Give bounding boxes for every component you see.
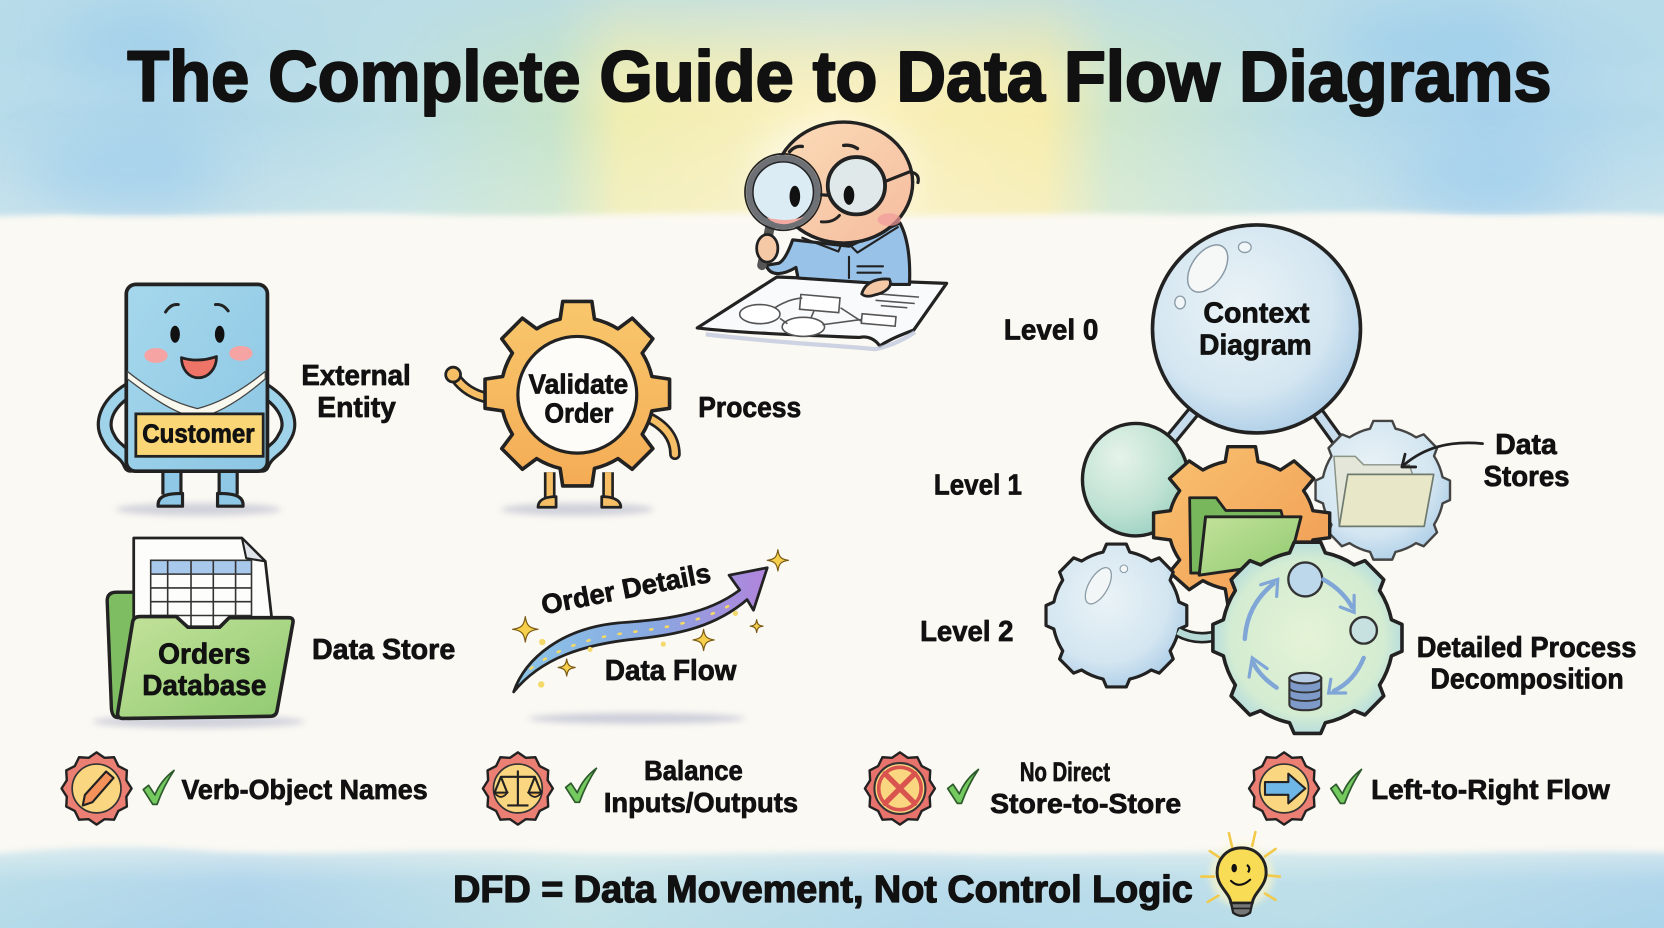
orange gear with green folder [1154,447,1330,604]
right gear with faded data store [1316,421,1450,560]
hands [757,235,778,262]
label: external entity: External [301,360,411,392]
badge: pencil [62,752,132,825]
external entity: customer character [105,284,288,506]
customer label [136,414,263,456]
face [144,304,253,378]
gear [485,301,670,486]
customer label: Customer [142,421,255,449]
body [126,284,267,471]
glasses [828,157,885,214]
cycle arrows [1245,579,1364,693]
rule: verb-object names: Verb-Object Names [181,774,428,805]
level labels [920,315,1098,648]
label: process: Process [698,392,801,424]
data store: orders database folder [107,538,293,718]
hierarchy diagram [1046,225,1483,733]
level 0 context bubble: Diagram [1199,329,1312,361]
data store shadow [92,715,305,728]
shirt [766,223,910,284]
label: detailed process decomposition: Detailed Process [1417,632,1636,664]
connector between level 2 gears [1178,631,1220,638]
rule: no direct store-to-store [865,752,1181,825]
footer takeaway: DFD = Data Movement, Not Control Logic [453,868,1193,911]
data flow arrow with sparkles [513,550,788,724]
entity shadow [116,503,281,516]
rule: balance inputs/outputs: Inputs/Outputs [604,787,798,818]
folder back [107,592,154,717]
flow shadow [528,713,745,724]
level labels: Level 0 [1004,315,1098,347]
process shadow [501,503,654,516]
level labels: Level 1 [934,470,1022,502]
label: data stores: Data [1495,429,1558,461]
badge: scales [483,752,553,825]
folder front [118,617,293,718]
gear text [528,369,628,428]
flow caption: Data Flow [605,655,737,687]
label: external entity: Entity [317,392,396,424]
character: analyst with magnifying glass [697,122,947,349]
badge: arrow [1249,752,1319,825]
spreadsheet page [134,538,274,637]
folder text: Orders [158,638,250,670]
badge: prohibited [865,752,935,825]
label: data store: Data Store [312,634,455,666]
gear text: Validate [528,369,628,400]
level 0 context bubble [1152,225,1360,433]
callout arrow to data stores [1402,443,1483,467]
head [775,122,913,243]
sparkles [513,550,788,688]
check [566,768,596,802]
arms and legs [446,367,675,507]
flow label: Order Details [539,557,713,620]
level 0 context bubble: Context [1203,298,1310,330]
level labels: Level 2 [920,616,1013,648]
label: detailed process decomposition [1417,632,1636,696]
label: data stores [1484,429,1570,493]
rule: left-to-right flow: Left-to-Right Flow [1371,774,1610,805]
legs [158,471,243,506]
folder text: Database [142,670,266,702]
decomposition nodes [1288,562,1322,596]
level 1 green bubble [1082,423,1189,536]
check [143,770,174,804]
rule: balance inputs/outputs [483,752,798,825]
icon: winking light bulb [1201,832,1280,916]
check [948,769,978,803]
label: detailed process decomposition: Decomposition [1431,664,1624,696]
connector stems [1167,408,1341,446]
database icon [1289,673,1321,710]
rule: no direct store-to-store: Store-to-Store [990,788,1181,819]
rule: no direct store-to-store: No Direct [1020,757,1110,787]
title: The Complete Guide to Data Flow Diagrams [127,38,1552,117]
rule: verb-object names [62,752,428,825]
rule: left-to-right flow [1249,752,1610,825]
gear text: Order [544,397,614,428]
arms [105,389,288,465]
diagram sheet [697,277,947,349]
arrow [514,568,767,692]
footer watercolor band [0,844,1664,928]
check [1331,769,1362,803]
process: validate order gear character [446,301,675,507]
header watercolor band [0,0,1664,239]
label: external entity [301,360,411,424]
magnifying glass [762,225,770,265]
rule: balance inputs/outputs: Balance [644,755,743,786]
folder text [142,638,266,702]
label: data stores: Stores [1484,461,1570,493]
level 2 decomposition gear [1213,542,1402,733]
level 2 left gear [1046,544,1187,687]
